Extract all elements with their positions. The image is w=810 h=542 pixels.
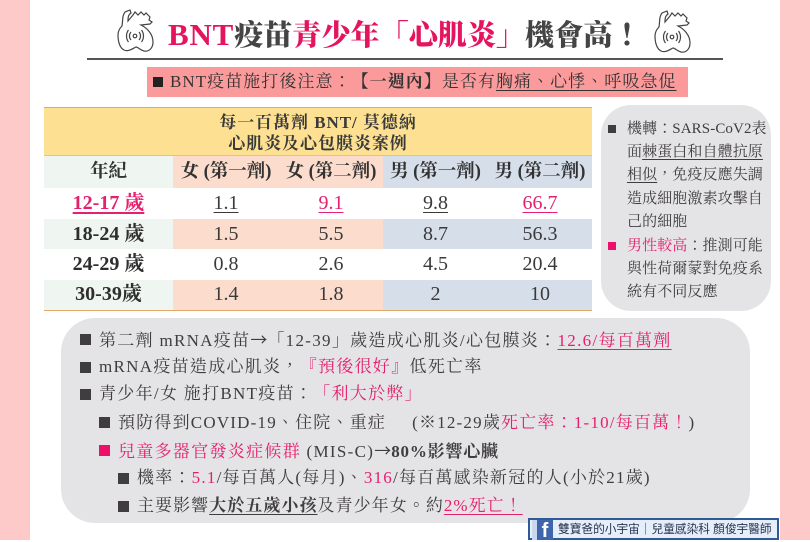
row 24-29: 24-29 歲 bbox=[73, 253, 144, 275]
table heading: 心肌炎及心包膜炎案例 bbox=[228, 134, 408, 153]
row 12-17: 1.1 bbox=[214, 192, 238, 214]
mechanism text: 與性荷爾蒙對免疫系 bbox=[627, 261, 763, 277]
row 30-39: 1.8 bbox=[318, 283, 344, 305]
row 24-29 bbox=[73, 252, 558, 275]
title rule bbox=[87, 58, 723, 60]
table column headings: 男 (第二劑) bbox=[495, 162, 585, 182]
icon: heart left bbox=[117, 9, 154, 52]
row 24-29: 0.8 bbox=[214, 253, 238, 275]
summary line 2: mRNA疫苗造成心肌炎，『預後很好』低死亡率 bbox=[99, 357, 483, 376]
table column headings: 男 (第一劑) bbox=[390, 162, 481, 182]
table heading bbox=[219, 113, 417, 153]
table bbox=[44, 107, 592, 312]
table header band bbox=[44, 107, 592, 156]
summary line 4: 預防得到COVID-19、住院、重症 (※12-29歲死亡率：1-10/每百萬！) bbox=[118, 413, 695, 432]
alert banner: BNT疫苗施打後注意：【一週內】是否有胸痛、心悸、呼吸急促 bbox=[170, 72, 676, 91]
table column bands bbox=[44, 156, 592, 311]
icon: facebook bbox=[532, 520, 553, 540]
title: BNT疫苗青少年「心肌炎」機會高！ bbox=[168, 17, 642, 52]
row 18-24: 8.7 bbox=[423, 223, 448, 245]
row 18-24 bbox=[73, 222, 558, 245]
alert banner bbox=[147, 67, 688, 97]
mechanism text: 統有不同反應 bbox=[627, 284, 718, 300]
mechanism text: 己的細胞 bbox=[627, 214, 687, 230]
row 18-24: 1.5 bbox=[214, 223, 238, 245]
summary line 6: 機率：5.1/每百萬人(每月)、316/每百萬感染新冠的人(小於21歲) bbox=[137, 468, 651, 487]
mechanism text: 機轉：SARS-CoV2表 bbox=[627, 120, 767, 136]
right pink margin bbox=[780, 0, 810, 540]
mechanism text: 面棘蛋白和自體抗原 bbox=[627, 144, 763, 160]
summary line 5: 兒童多器官發炎症候群 (MIS-C)→80%影響心臟 bbox=[118, 437, 499, 462]
row 30-39: 2 bbox=[430, 283, 440, 305]
table heading: 每一百萬劑 BNT/ 莫德納 bbox=[219, 113, 417, 132]
summary line 1: 第二劑 mRNA疫苗→「12-39」歲造成心肌炎/心包膜炎：12.6/每百萬劑 bbox=[99, 326, 672, 351]
row 24-29: 20.4 bbox=[522, 253, 558, 275]
icon: heart right bbox=[654, 10, 691, 53]
row 30-39: 1.4 bbox=[214, 283, 238, 305]
icon: facebook: f bbox=[542, 520, 548, 542]
table column headings: 女 (第二劑) bbox=[286, 162, 376, 182]
mechanism text: 造成細胞激素攻擊自 bbox=[627, 191, 763, 207]
row 12-17: 9.1 bbox=[318, 192, 344, 214]
table column headings: 女 (第一劑) bbox=[181, 162, 271, 182]
panel: summary bbox=[61, 318, 750, 523]
panel: mechanism bbox=[601, 105, 771, 311]
left pink margin bbox=[0, 0, 30, 540]
summary line 7: 主要影響大於五歲小孩及青少年女。約2%死亡！ bbox=[137, 496, 523, 515]
summary bullets bbox=[80, 334, 129, 512]
row 30-39: 10 bbox=[530, 283, 550, 305]
row 24-29: 2.6 bbox=[318, 253, 344, 275]
summary line 3: 青少年/女 施打BNT疫苗：「利大於弊」 bbox=[99, 384, 423, 403]
row 12-17: 9.8 bbox=[423, 192, 448, 214]
mechanism text: 相似，免疫反應失調 bbox=[627, 167, 763, 183]
row 12-17: 66.7 bbox=[522, 192, 558, 214]
row 12-17: 12-17 歲 bbox=[73, 192, 144, 214]
table column headings: 年紀 bbox=[90, 162, 127, 182]
row 18-24: 56.3 bbox=[522, 223, 558, 245]
row 30-39: 30-39歲 bbox=[75, 283, 142, 305]
row 24-29: 4.5 bbox=[423, 253, 448, 275]
row 18-24: 18-24 歲 bbox=[73, 223, 144, 245]
row 18-24: 5.5 bbox=[318, 223, 344, 245]
row 12-17 bbox=[72, 192, 558, 214]
row 30-39 bbox=[75, 282, 550, 305]
mechanism text bbox=[627, 120, 767, 300]
facebook badge bbox=[528, 518, 779, 540]
table column headings bbox=[90, 160, 585, 182]
badge text: 雙寶爸的小宇宙｜兒童感染科 顏俊宇醫師 bbox=[558, 523, 772, 536]
mechanism text: 男性較高：推測可能 bbox=[627, 238, 763, 254]
